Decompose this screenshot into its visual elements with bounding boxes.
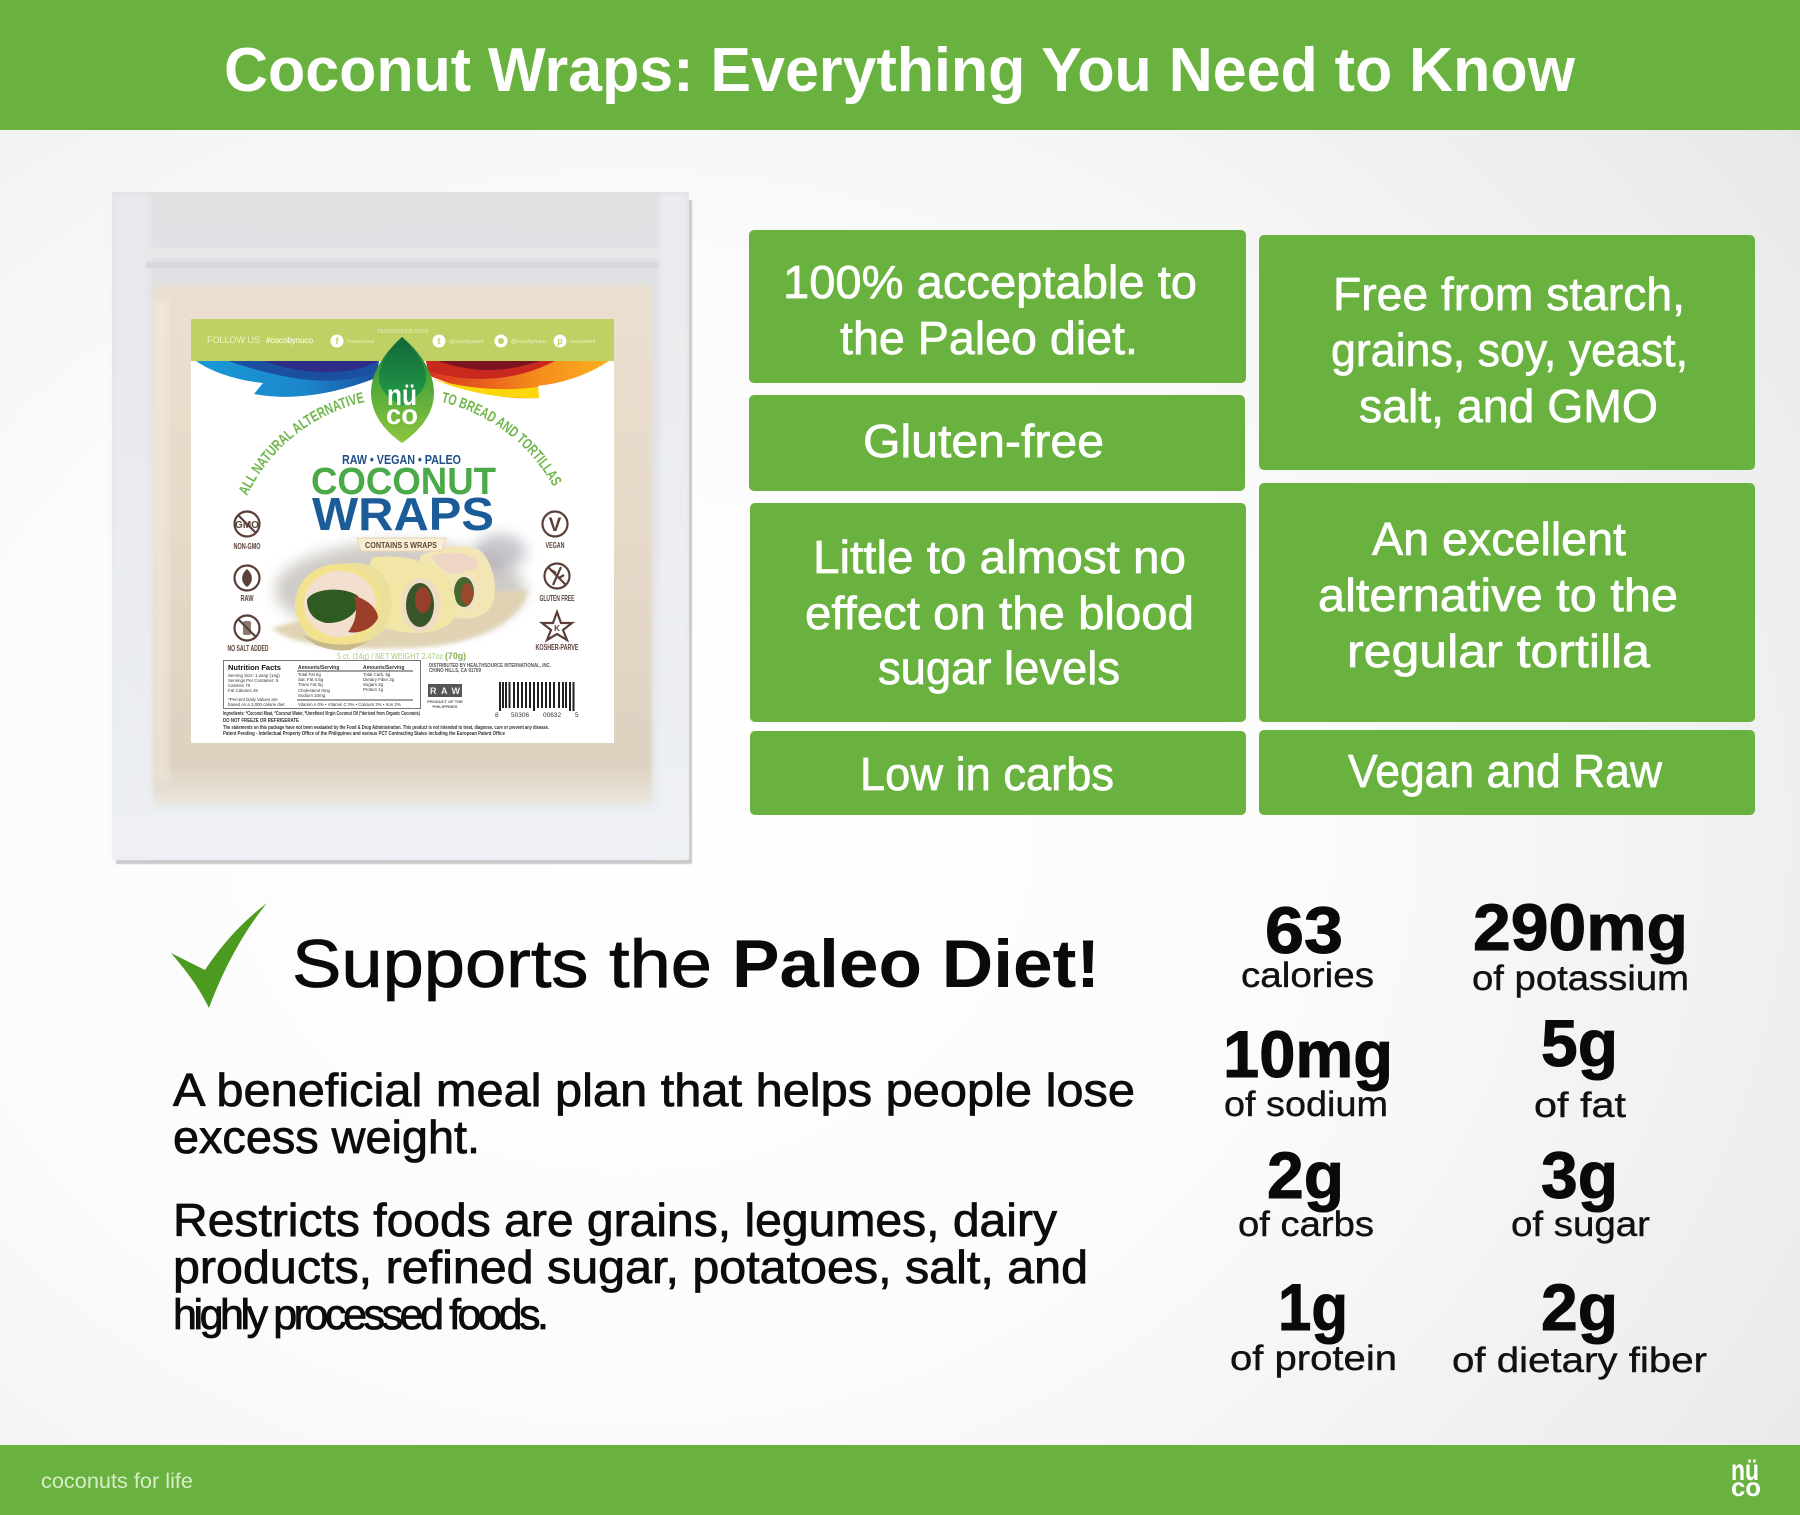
rainbow swoosh left (196, 361, 379, 397)
raw badge: RAW (430, 686, 460, 696)
text block: weight loss (173, 1064, 1135, 1163)
stat: sugar (1511, 1138, 1650, 1244)
nutrition facts panel: Amounts/Serving (298, 665, 339, 671)
stat: carbs (1238, 1138, 1374, 1244)
stat: calories (1241, 893, 1374, 995)
bag shadow (116, 200, 692, 864)
package label: @cocobynuco (449, 339, 484, 345)
net weight: (70g) (445, 651, 466, 662)
nutrition facts panel: Servings Per Container: 5 (228, 678, 279, 683)
panel: paleo acceptable (749, 230, 1246, 383)
nutrition facts panel: Fat Calories 45 (228, 688, 258, 693)
ingredient and legal text: Ingredients: *Coconut Meat, *Coconut Water, *Unrefined Virgin Coconut Oil (*derived from Organic Coconuts) (223, 711, 420, 717)
stat: potassium: of potassium (1472, 959, 1689, 998)
nutrition facts panel: Serving Size: 1 wrap (14g) (228, 673, 280, 678)
stat: protein (1230, 1270, 1397, 1378)
ingredient and legal text: DO NOT FREEZE OR REFRIGERATE (223, 718, 300, 724)
panel: free from: salt, and GMO (1359, 380, 1658, 432)
stat: sodium (1223, 1017, 1393, 1124)
nutrition facts panel: *Percent Daily Values are (228, 697, 278, 702)
stat: sugar: 3g (1541, 1138, 1618, 1212)
stat: sodium: 10mg (1223, 1017, 1393, 1091)
nutrition facts panel: Dietary Fiber 2g (363, 677, 395, 682)
package label: f (336, 336, 340, 346)
contains banner (357, 538, 446, 551)
panel: tortilla alternative: An excellent (1372, 513, 1626, 565)
panel: tortilla alternative (1259, 483, 1755, 722)
panel: vegan and raw: Vegan and Raw (1348, 745, 1663, 797)
product name (311, 453, 496, 540)
panel: free from (1259, 235, 1755, 470)
stat: potassium (1472, 890, 1689, 998)
diet icons left: NON-GMO (234, 542, 260, 551)
stat: calories: 63 (1265, 893, 1343, 967)
diet icons left (228, 512, 269, 653)
package label: #cocobynuco (266, 336, 314, 345)
stat: carbs: 2g (1267, 1138, 1344, 1212)
nutrition facts panel: based on a 2,000 calorie diet. (228, 702, 286, 707)
nutrition facts panel: Cholesterol 0mg (298, 688, 331, 693)
stat: dietary fiber (1452, 1270, 1707, 1380)
stat: sugar: of sugar (1511, 1205, 1650, 1244)
product name: WRAPS (312, 488, 494, 540)
panel: blood sugar: sugar levels (878, 642, 1120, 694)
package label: nucoconut.com (378, 326, 428, 335)
wraps inside bag (153, 285, 652, 805)
icon: nuco logo: co (1731, 1472, 1761, 1502)
nutrition facts panel: Calories 70 (228, 683, 251, 688)
stat: fat (1534, 1006, 1626, 1125)
arc tagline: TO BREAD AND TORTILLAS (443, 392, 562, 486)
text block: restricted foods (173, 1194, 1088, 1339)
panel: gluten-free: Gluten-free (863, 415, 1104, 467)
footer tagline: coconuts for life (41, 1470, 193, 1493)
barcode: 5 (575, 712, 579, 719)
panel: low in carbs (750, 731, 1246, 815)
stat: fat: 5g (1541, 1006, 1618, 1080)
diet icons left: RAW (240, 594, 254, 603)
panel: low in carbs: Low in carbs (860, 748, 1114, 800)
nutrition facts panel: Trans Fat 0g (298, 682, 323, 687)
text block: weight loss: A beneficial meal plan that helps people lose (173, 1064, 1135, 1116)
arc tagline (239, 392, 562, 496)
nutrition facts panel: Sugars 3g (363, 682, 384, 687)
panel: vegan and raw (1259, 730, 1755, 815)
distributor text: CHINO HILLS, CA 91709 (429, 668, 481, 674)
roll two (360, 556, 456, 633)
panel: paleo acceptable: the Paleo diet. (840, 312, 1138, 364)
arc tagline: ALL NATURAL ALTERNATIVE (239, 392, 364, 496)
stat: sodium: of sodium (1224, 1085, 1388, 1124)
nutrition facts panel: Sodium 10mg (298, 693, 326, 698)
nutrition facts panel: Vitamin A 0% • Vitamin C 0% • Calcium 2% • Iron 2% (298, 702, 401, 707)
diet icons right: V (549, 515, 562, 536)
barcode: 00632 (543, 712, 561, 719)
stats: nutrition facts (1223, 890, 1707, 1380)
raw badge: PHILIPPINES (433, 704, 458, 709)
diet icons right: GLUTEN FREE (540, 594, 575, 603)
nutrition facts panel: Sat. Fat 4.5g (298, 677, 324, 682)
package label (191, 319, 614, 743)
diet icons left: GMO (235, 520, 259, 531)
raw badge: PRODUCT OF THE (427, 699, 463, 704)
stat: potassium: 290mg (1473, 890, 1688, 964)
panel: free from: grains, soy, yeast, (1331, 324, 1688, 376)
nuco leaf logo: nü (387, 379, 417, 412)
icon: nuco logo (1731, 1454, 1761, 1502)
title: Coconut Wraps: Everything You Need to Know (224, 36, 1576, 105)
stat: calories: calories (1241, 956, 1374, 995)
nutrition facts panel: Nutrition Facts (228, 663, 281, 672)
nutrition facts panel: Total Carb. 6g (363, 672, 391, 677)
heading: supports the paleo diet: Supports the (292, 926, 712, 1002)
product name: COCONUT (311, 461, 496, 503)
panel: blood sugar: Little to almost no (813, 531, 1186, 583)
roll one (299, 563, 392, 646)
nutrition facts panel (224, 660, 420, 708)
label top band (191, 319, 614, 361)
contains banner: CONTAINS 5 WRAPS (365, 541, 438, 550)
panel: tortilla alternative: alternative to the (1318, 569, 1678, 621)
footer bar (0, 1445, 1800, 1515)
raw badge (427, 684, 463, 709)
diet icons right (536, 512, 579, 652)
nuco leaf logo: co (386, 399, 418, 430)
icon: nuco logo: nü (1731, 1454, 1759, 1487)
barcode: 8 (495, 712, 499, 719)
barcode (495, 682, 579, 719)
stat: protein: of protein (1230, 1339, 1397, 1378)
stat: dietary fiber: 2g (1541, 1270, 1618, 1344)
panel: blood sugar (750, 503, 1246, 722)
package label: t (438, 336, 440, 346)
text block: weight loss: excess weight. (173, 1111, 480, 1163)
panel: paleo acceptable: 100% acceptable to (783, 256, 1197, 308)
photo: sliced wraps (272, 534, 528, 650)
panel: gluten-free (749, 395, 1245, 491)
text block: restricted foods: products, refined sugar, potatoes, salt, and (173, 1241, 1088, 1293)
stat: protein: 1g (1278, 1270, 1348, 1344)
text block: restricted foods: highly processed foods. (173, 1291, 549, 1339)
package label: FOLLOW US (207, 335, 260, 345)
panel: tortilla alternative: regular tortilla (1347, 625, 1650, 677)
barcode: 50306 (511, 712, 529, 719)
ingredient and legal text: The statements on this package have not been evaluated by the Food & Drug Administration. This product is not intended to treat, diagnose, cure or prevent any disease. (223, 725, 549, 731)
package label: nucoconut (570, 339, 596, 345)
product name: RAW • VEGAN • PALEO (342, 453, 461, 467)
roll three (420, 546, 495, 619)
rainbow swoosh right (426, 361, 609, 398)
header banner (0, 0, 1800, 130)
stat: carbs: of carbs (1238, 1205, 1374, 1244)
stat: dietary fiber: of dietary fiber (1452, 1341, 1707, 1380)
diet icons left: NO SALT ADDED (228, 644, 269, 653)
text block: restricted foods: Restricts foods are grains, legumes, dairy (173, 1194, 1057, 1246)
ingredient and legal text (223, 711, 549, 737)
nuco leaf logo (371, 337, 434, 443)
distributor text (429, 663, 552, 674)
heading: supports the paleo diet (292, 926, 1100, 1002)
package label: p (557, 336, 563, 346)
nutrition facts panel: Total Fat 5g (298, 672, 321, 677)
package label: /nucoconut (347, 339, 374, 345)
diet icons right: KOSHER-PARVE (536, 643, 579, 652)
panel: free from: Free from starch, (1333, 268, 1685, 320)
stat: fat: of fat (1534, 1086, 1626, 1125)
product photo: coconut wraps package (112, 192, 692, 864)
heading: supports the paleo diet: Paleo Diet! (732, 926, 1100, 1002)
diet icons right: VEGAN (546, 541, 565, 550)
package label: @cocobynuco (511, 339, 546, 345)
distributor text: DISTRIBUTED BY HEALTHSOURCE INTERNATIONAL, INC. (429, 663, 552, 669)
nutrition facts panel: Protein 1g (363, 687, 384, 692)
diet icons right: K (554, 624, 560, 633)
ingredient and legal text: Patent Pending - Intellectual Property Office of the Philippines and various PCT Contracting States including the European Patent Office (223, 731, 505, 737)
panel: blood sugar: effect on the blood (805, 587, 1194, 639)
nutrition facts panel: Amounts/Serving (363, 665, 404, 671)
icon: check mark (171, 903, 267, 1008)
net weight: 5 ct. (14g) / NET WEIGHT 2.47oz (337, 651, 443, 661)
